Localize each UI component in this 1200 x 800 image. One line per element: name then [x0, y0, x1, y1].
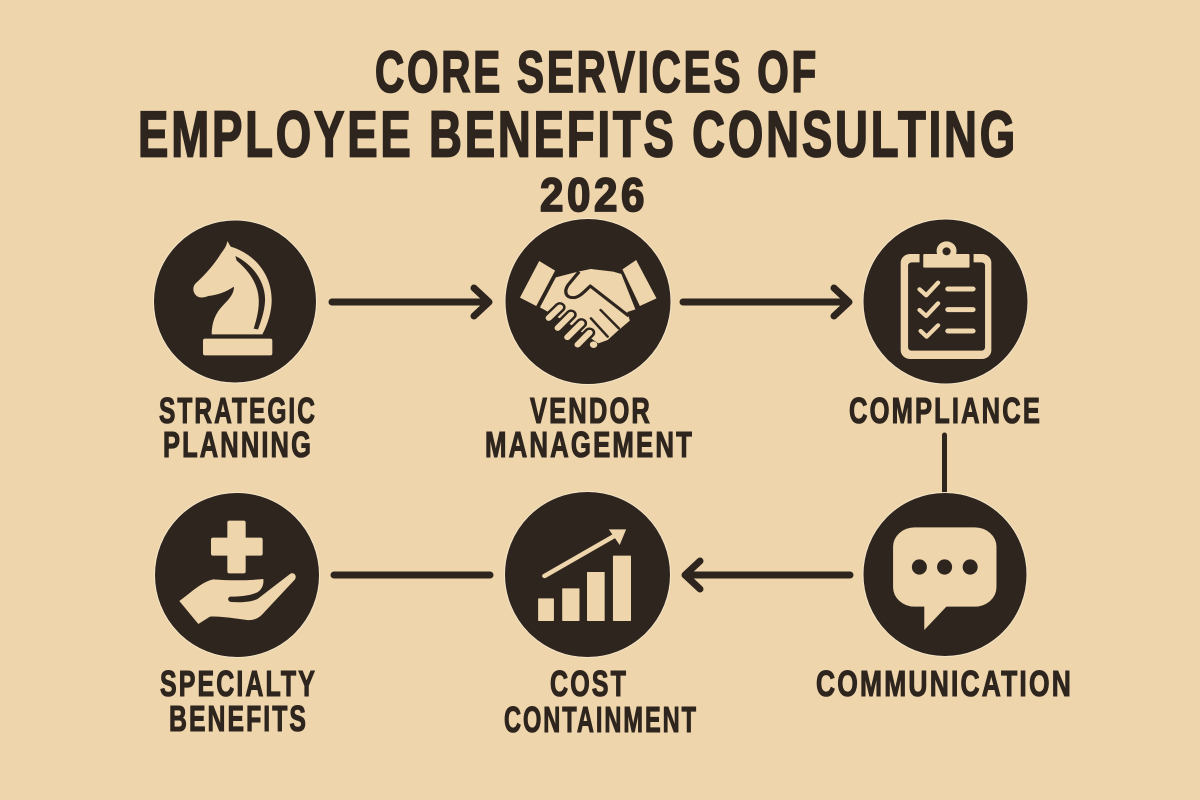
label: specialty benefits: SPECIALTY — [160, 663, 317, 704]
title: 2026 — [540, 168, 648, 221]
label: cost containment — [504, 663, 698, 740]
label: communication: COMMUNICATION — [816, 663, 1073, 704]
node: vendor management — [485, 218, 694, 465]
node: communication — [816, 492, 1073, 704]
icon: rising bar chart — [504, 492, 670, 658]
connector: cost containment to specialty benefits — [334, 572, 490, 578]
icon: handshake — [505, 218, 671, 384]
icon: speech bubble — [863, 492, 1027, 656]
icon: hand holding medical cross — [154, 492, 320, 658]
icon: clipboard checklist — [863, 219, 1028, 384]
arrow: strategic planning to vendor management — [332, 288, 489, 316]
title: CORE SERVICES OF — [375, 40, 819, 105]
node: specialty benefits — [154, 492, 320, 739]
node: strategic planning — [154, 220, 317, 465]
title — [138, 40, 1018, 221]
label: specialty benefits — [160, 663, 317, 739]
arrow: communication to cost containment — [685, 561, 850, 589]
label: specialty benefits: BENEFITS — [169, 698, 308, 739]
label: strategic planning — [159, 390, 317, 465]
label: vendor management: MANAGEMENT — [485, 424, 694, 465]
arrow: vendor management to compliance — [683, 288, 849, 316]
label: compliance: COMPLIANCE — [849, 390, 1042, 431]
node: cost containment — [504, 492, 698, 740]
label: vendor management: VENDOR — [530, 390, 652, 431]
icon: chess knight — [154, 220, 316, 383]
label: cost containment: COST — [550, 663, 628, 704]
label: strategic planning: STRATEGIC — [159, 390, 317, 431]
connector: compliance to communication — [942, 435, 947, 495]
label: strategic planning: PLANNING — [163, 424, 313, 465]
label: vendor management — [485, 390, 694, 465]
node: compliance — [849, 219, 1042, 431]
label: cost containment: CONTAINMENT — [504, 699, 698, 740]
